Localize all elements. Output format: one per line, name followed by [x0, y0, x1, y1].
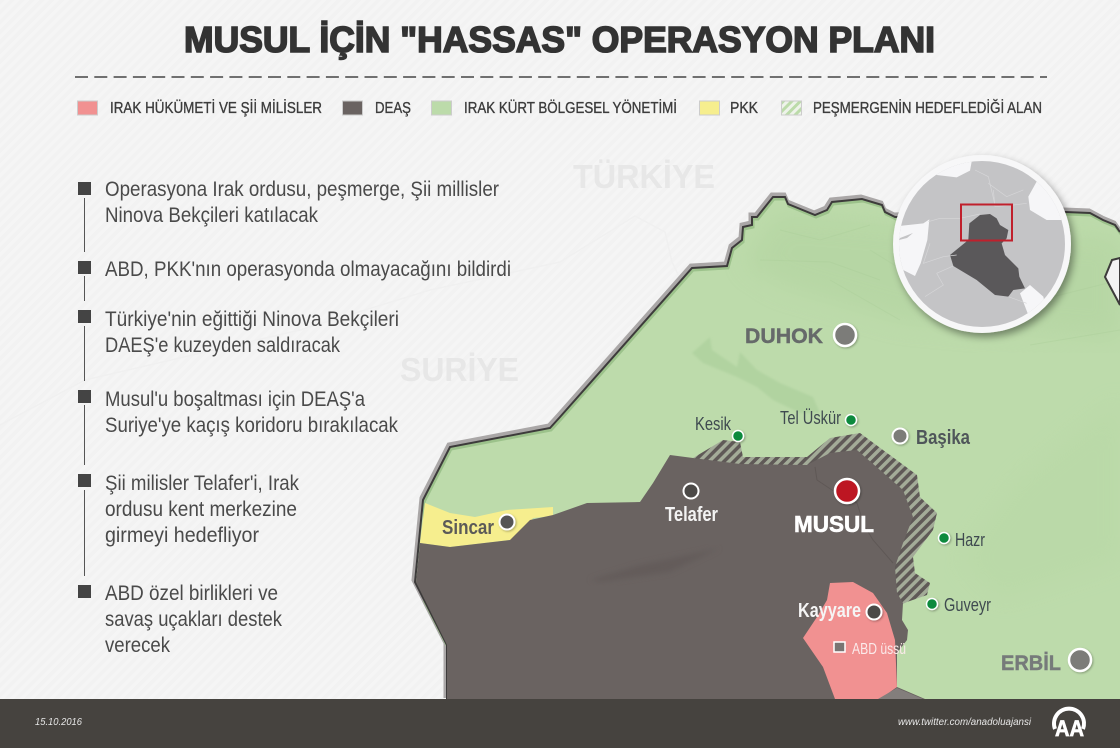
bullet 5: girmeyi hedefliyor — [105, 524, 259, 547]
village: Hazr — [938, 530, 985, 550]
city: Sincar — [442, 514, 514, 539]
legend item: PKK — [700, 100, 758, 117]
label: Hazr — [955, 530, 985, 550]
village: Guveyr — [926, 595, 991, 615]
bullet 6: ABD özel birlikleri ve — [105, 582, 278, 605]
label: Kesik — [695, 414, 732, 434]
city: Duhok — [745, 324, 856, 348]
label: DUHOK — [745, 325, 823, 348]
bullet 6: savaş uçakları destek — [105, 608, 282, 631]
city: Başika — [892, 427, 971, 449]
label: Kayyare — [798, 600, 861, 622]
bullet 5 — [78, 472, 299, 547]
bullet 4: Musul'u boşaltması için DEAŞ'a — [105, 388, 365, 411]
label: Guveyr — [944, 595, 991, 615]
legend item: peşmerge target — [782, 98, 1042, 117]
bullet 1 — [78, 178, 499, 227]
terrain shading — [423, 198, 1120, 646]
label: Başika — [916, 427, 971, 449]
timeline connector — [84, 198, 86, 576]
globe disc — [893, 155, 1071, 333]
bullet 5: Şii milisler Telafer'i, Irak — [105, 472, 299, 495]
marker — [500, 514, 514, 530]
seas — [899, 162, 1062, 313]
label: ERBİL — [1001, 652, 1061, 675]
city: Erbil — [1001, 649, 1091, 675]
country borders — [923, 170, 1027, 303]
marker — [866, 604, 882, 620]
date: 15.10.2016 — [35, 717, 82, 728]
base: ABD üssü — [834, 641, 906, 658]
bullet 3: DAEŞ'e kuzeyden saldıracak — [105, 334, 340, 357]
border line — [415, 197, 1120, 700]
region: PKK Sincar — [420, 503, 553, 547]
legend — [78, 98, 1042, 117]
label: Sincar — [442, 517, 494, 539]
label: Tel Üskür — [780, 408, 841, 428]
bullet 6 — [78, 582, 282, 657]
marker — [834, 642, 845, 652]
locator rectangle — [961, 204, 1012, 240]
marker — [926, 598, 938, 610]
legend item: DEAŞ — [342, 100, 411, 117]
region: DEAŞ — [416, 450, 925, 699]
marker — [938, 532, 950, 544]
marker — [684, 484, 698, 498]
Iraq silhouette — [950, 214, 1025, 297]
terrain: Dohuk lake — [692, 337, 820, 413]
label: MUSUL — [794, 511, 874, 537]
marker — [846, 414, 856, 426]
label: ABD üssü — [852, 641, 906, 658]
region: southern grey wedge — [878, 688, 923, 699]
neighbouring land — [899, 161, 1065, 327]
Cyprus — [899, 233, 913, 240]
bullet 3: Türkiye'nin eğittiği Ninova Bekçileri — [105, 308, 399, 331]
bullet 1: Operasyona Irak ordusu, peşmerge, Şii millisler — [105, 178, 499, 201]
legend item: DEAŞ: DEAŞ — [375, 100, 411, 117]
legend item: peşmerge target: PEŞMERGENİN HEDEFLEDİĞİ ALAN — [813, 98, 1042, 117]
bullet list — [78, 178, 511, 657]
inset locator globe — [890, 155, 1071, 333]
bullet 6: verecek — [105, 634, 170, 657]
icon: AA logo — [1054, 709, 1084, 741]
bullet 4 — [78, 388, 398, 437]
title: MUSUL İÇİN "HASSAS" OPERASYON PLANI — [184, 19, 935, 60]
map — [414, 195, 1120, 701]
label: Telafer — [665, 504, 718, 526]
village: Kesik — [695, 414, 744, 442]
marker — [834, 324, 856, 346]
terrain: DEAŞ ridge — [590, 548, 720, 582]
city: Kayyare — [798, 600, 882, 622]
bullet 1: Ninova Bekçileri katılacak — [105, 204, 318, 227]
hatched area: peşmerge target — [693, 433, 937, 610]
footer bar — [0, 699, 1120, 748]
region: Irak Kürt Bölgesel Yönetimi — [415, 197, 1120, 699]
marker — [1069, 649, 1091, 671]
marker — [732, 430, 744, 442]
border casing — [414, 195, 1119, 698]
legend item: PKK: PKK — [730, 100, 758, 117]
city: Musul — [794, 479, 874, 537]
Iran border enclave — [1105, 258, 1120, 305]
city: Telafer — [665, 484, 718, 526]
bullet 2: ABD, PKK'nın operasyonda olmayacağını bildirdi — [105, 258, 511, 281]
marker — [892, 428, 908, 444]
icon: AA logo: AA — [1055, 716, 1084, 741]
marker — [835, 479, 859, 503]
bullet 3 — [78, 308, 399, 357]
twitter address: www.twitter.com/anadoluajansi — [898, 717, 1032, 728]
country label: Suriye: SURİYE — [400, 351, 519, 388]
river Tigris — [815, 467, 893, 563]
bullet 5: ordusu kent merkezine — [105, 498, 297, 521]
legend item: Irak hükümeti — [78, 98, 322, 117]
legend item: IKBY — [432, 98, 677, 117]
legend item: IKBY: IRAK KÜRT BÖLGESEL YÖNETİMİ — [464, 98, 677, 117]
region: Irak hükümeti ve Şii milisler — [803, 582, 897, 699]
country label: Türkiye: TÜRKİYE — [573, 158, 715, 195]
bullet 4: Suriye'ye kaçış koridoru bırakılacak — [105, 414, 398, 437]
village: Tel Üskür — [780, 408, 856, 428]
legend item: Irak hükümeti: IRAK HÜKÜMETİ VE Şİİ MİLİSLER — [110, 98, 322, 117]
